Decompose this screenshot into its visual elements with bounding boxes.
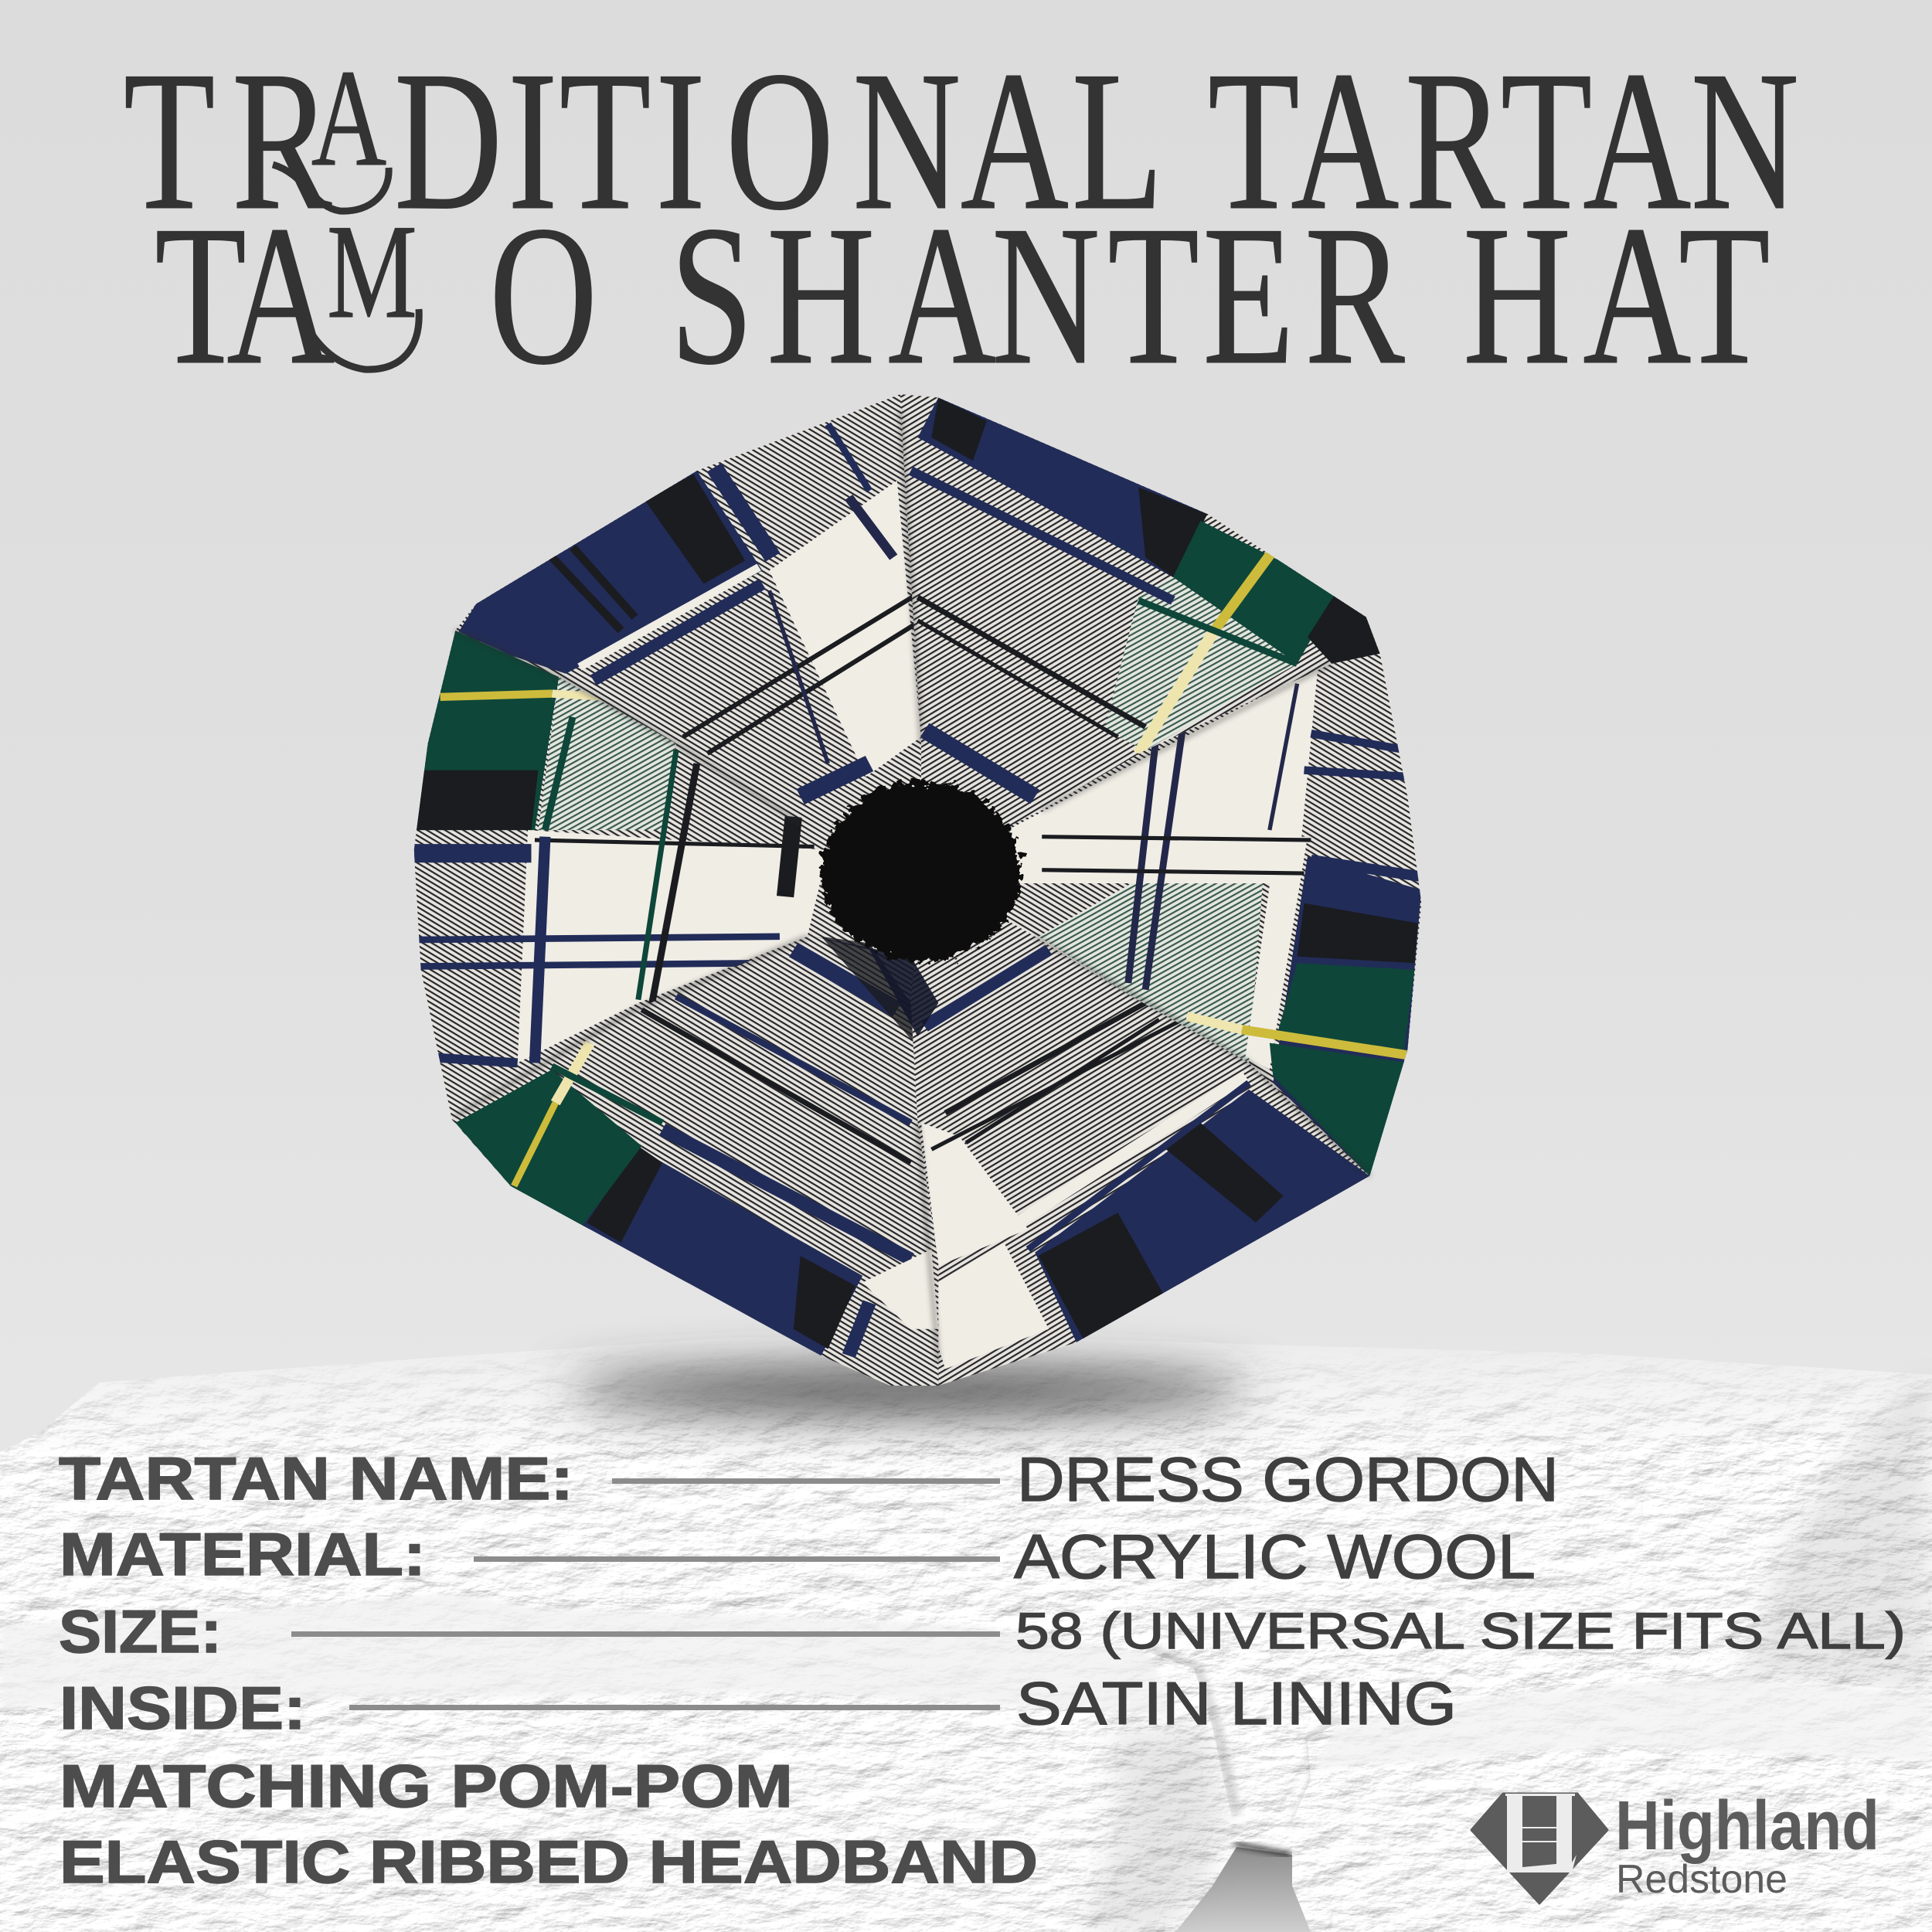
panel: right: [1007, 654, 1422, 1176]
shaded right face of slab: [1739, 1376, 1932, 1692]
brand name: Highland: [1615, 1787, 1879, 1865]
panel: top-left: [456, 394, 921, 833]
smooth top surface of slab: [0, 1338, 1932, 1461]
hat: [414, 394, 1422, 1386]
row: size: 58 (UNIVERSAL SIZE FITS ALL): [1015, 1602, 1906, 1659]
swash on the M of TAM: [302, 309, 419, 369]
rock pedestal: [0, 1338, 1932, 1932]
hat shadow on slab: [568, 1369, 1248, 1413]
row: tartan name: [59, 1444, 1559, 1515]
row: tartan name: TARTAN NAME:: [59, 1444, 573, 1512]
swash on the A of TRADITIONAL: [273, 165, 389, 211]
crevice shadow: [1235, 1844, 1291, 1855]
row: size: SIZE:: [59, 1597, 222, 1665]
brand subtitle: Redstone: [1616, 1857, 1787, 1902]
pom-pom: [815, 781, 1021, 1036]
ground gap between rocks: [1175, 1847, 1314, 1932]
title line 2: M: [327, 197, 417, 346]
panel: lower-right: [911, 921, 1369, 1386]
icon: diamond monogram: [1471, 1794, 1607, 1903]
row: inside: INSIDE:: [60, 1674, 306, 1742]
panel: lower-left: [451, 921, 938, 1386]
hat panels: [414, 394, 1422, 1386]
row: tartan name: DRESS GORDON: [1017, 1445, 1559, 1515]
row: material: [60, 1520, 1536, 1592]
title: [124, 29, 1799, 406]
row: size: [59, 1597, 1906, 1665]
fold shadows: [455, 411, 1369, 1362]
row: material: ACRYLIC WOOL: [1014, 1522, 1536, 1592]
back rock slab: [0, 1338, 1932, 1932]
panel: left: [414, 631, 835, 1119]
row: inside: [60, 1669, 1457, 1742]
contact shadow of front rocks: [1151, 1650, 1341, 1822]
feature: matching pom-pom: MATCHING POM-POM: [60, 1752, 793, 1820]
title line 1: TR: [124, 29, 332, 252]
top of front left rock: [0, 1593, 1175, 1716]
logo: Highland Redstone: [1471, 1787, 1879, 1903]
row: material: MATERIAL:: [60, 1520, 426, 1588]
title line 1: A: [311, 41, 386, 196]
title line 2: TA: [155, 184, 335, 406]
spec rows: [59, 1444, 1906, 1896]
title line 2: O SHANTER HAT: [440, 184, 1770, 406]
title line 1: DITIONAL TARTAN: [394, 29, 1799, 252]
row: inside: SATIN LINING: [1016, 1669, 1457, 1737]
panel: top-right: [900, 394, 1380, 825]
front left rock: [0, 1593, 1231, 1932]
front right rock: [1292, 1676, 1932, 1932]
shaded side of front left rock: [1082, 1728, 1225, 1932]
top of front right rock: [1314, 1676, 1932, 1770]
feature: elastic headband: ELASTIC RIBBED HEADBAND: [60, 1828, 1038, 1896]
